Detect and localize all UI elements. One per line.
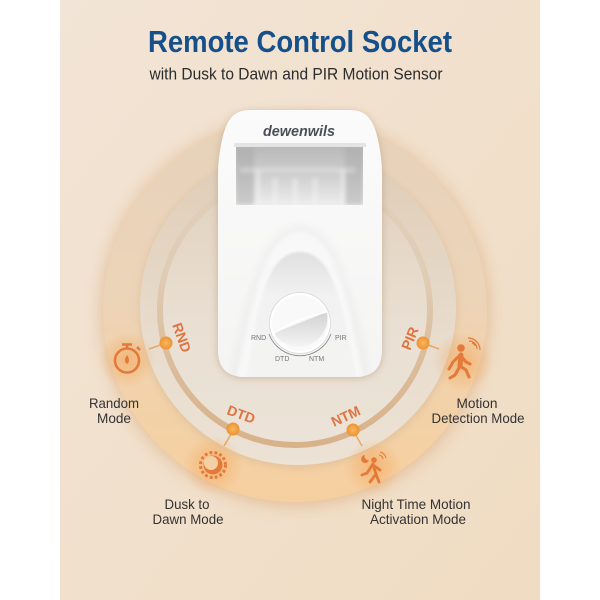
icon: stopwatch <box>99 332 155 388</box>
dial labels: DTD <box>275 356 289 363</box>
icon: walking person with sensor waves <box>433 332 493 392</box>
label: Dusk to Dawn Mode <box>152 496 224 527</box>
dial labels: RND <box>251 335 266 342</box>
sensor window <box>234 143 366 205</box>
label: Motion Detection Mode <box>432 395 525 426</box>
label: Night Time Motion Activation Mode: Night Time Motion <box>362 496 470 512</box>
label: Motion Detection Mode: Detection Mode <box>432 410 525 426</box>
marker: DTD: DTD <box>225 402 257 427</box>
label: Dusk to Dawn Mode: Dusk to <box>164 496 210 512</box>
marker: DTD <box>224 402 257 446</box>
dial labels: PIR <box>335 335 347 342</box>
subtitle: with Dusk to Dawn and PIR Motion Sensor <box>149 66 443 84</box>
brand logo: dewenwils <box>263 124 335 140</box>
icon: night motion <box>345 439 401 495</box>
icon: sun <box>183 435 243 495</box>
marker: RND <box>149 321 195 355</box>
marker: PIR: PIR <box>398 324 422 352</box>
device body contours <box>236 252 364 377</box>
dial recess <box>266 252 334 291</box>
label: Dusk to Dawn Mode: Dawn Mode <box>152 511 224 527</box>
marker: RND: RND <box>169 321 195 355</box>
label: Random Mode: Mode <box>97 410 131 426</box>
background panel <box>60 0 540 600</box>
title: Remote Control Socket <box>148 24 452 59</box>
label: Night Time Motion Activation Mode <box>362 496 470 527</box>
device: motion sensor socket <box>218 110 382 400</box>
dial knob <box>269 292 331 356</box>
concentric rings <box>101 118 489 506</box>
dial labels <box>251 335 347 363</box>
dial labels: NTM <box>309 356 324 363</box>
marker: NTM <box>329 402 363 446</box>
marker: NTM: NTM <box>329 402 363 430</box>
label: Random Mode <box>89 395 139 426</box>
raised body contour <box>226 226 374 400</box>
label: Random Mode: Random <box>89 395 139 411</box>
marker: PIR <box>398 324 439 352</box>
label: Night Time Motion Activation Mode: Activation Mode <box>370 511 466 527</box>
label: Motion Detection Mode: Motion <box>456 395 498 411</box>
